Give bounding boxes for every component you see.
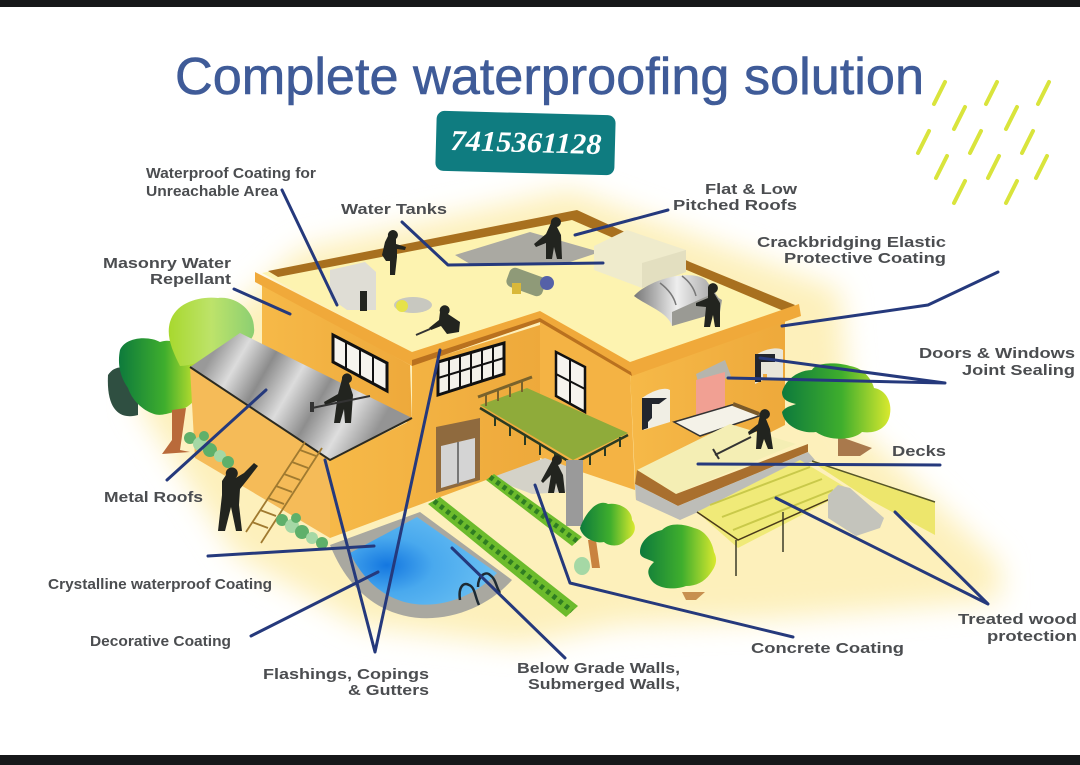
leader: flashings xyxy=(325,350,440,652)
label: joint sealing: Joint Sealing xyxy=(962,362,1075,379)
worker on roof back xyxy=(534,217,562,259)
leader lines xyxy=(167,190,998,658)
right wing arched window lower xyxy=(642,389,670,430)
metal roof xyxy=(190,333,412,460)
leader: metal roofs xyxy=(167,390,266,480)
label: gutters: & Gutters xyxy=(348,682,429,699)
label: crystalline: Crystalline waterproof Coating xyxy=(48,576,272,593)
ground patch under balcony xyxy=(490,458,566,494)
house xyxy=(190,210,815,538)
worker at pillar xyxy=(541,455,565,493)
right side tree xyxy=(782,363,890,456)
yellow fence xyxy=(812,461,935,535)
worker on deck xyxy=(713,409,773,459)
steps xyxy=(828,485,884,536)
rooftop box left xyxy=(330,262,376,311)
leader: crystalline xyxy=(208,546,374,556)
right wing side wall xyxy=(540,322,635,490)
shrub by pool xyxy=(276,513,328,549)
upper left wall xyxy=(262,283,412,425)
label: flashings copings: Flashings, Copings xyxy=(263,666,429,683)
label: metal roofs: Metal Roofs xyxy=(104,489,203,506)
rooftop pale block xyxy=(594,230,686,288)
label: crackbridging elastic: Crackbridging Elastic xyxy=(757,234,946,251)
lower left wall xyxy=(190,367,330,538)
upper left window xyxy=(333,335,387,391)
title: Complete waterproofing solution xyxy=(175,48,924,106)
swimming pool xyxy=(330,512,512,618)
label: unreachable area: Unreachable Area xyxy=(146,183,279,200)
worker crouching on roof xyxy=(416,305,460,335)
label: masonry water: Masonry Water xyxy=(103,255,231,272)
phone number badge xyxy=(435,111,616,175)
bottom black bar xyxy=(0,755,1080,765)
label: waterproof coating: Waterproof Coating for xyxy=(146,165,316,182)
pool ladder xyxy=(460,574,500,605)
label: submerged walls: Submerged Walls, xyxy=(528,676,680,693)
short hedge xyxy=(486,474,582,546)
leader: decks xyxy=(698,464,940,465)
label: protective coating: Protective Coating xyxy=(784,250,946,267)
pool rim xyxy=(330,512,512,618)
label: decks: Decks xyxy=(892,443,946,460)
deck xyxy=(635,424,815,520)
label: water tanks: Water Tanks xyxy=(341,201,447,218)
leader: crackbridging xyxy=(782,272,998,326)
label: pitched roofs: Pitched Roofs xyxy=(673,197,797,214)
roof back parapet xyxy=(268,210,795,312)
phone number badge: 7415361128 xyxy=(450,125,602,161)
small shrubs xyxy=(184,431,590,575)
leader: below grade xyxy=(452,548,565,658)
leader: concrete xyxy=(535,485,793,637)
leader: treated wood xyxy=(776,498,988,604)
ladder xyxy=(246,442,322,543)
worker at barrel tank xyxy=(696,283,720,327)
rooftop equipment xyxy=(330,230,722,326)
roof surface xyxy=(262,215,795,362)
right wing arched window top xyxy=(755,348,783,384)
leader: flat roofs xyxy=(575,210,668,235)
leader: doors and windows xyxy=(728,358,945,383)
label: decorative coating: Decorative Coating xyxy=(90,633,231,650)
label: repellant: Repellant xyxy=(150,271,231,288)
front ribbon window xyxy=(438,343,504,395)
rooftop cans xyxy=(505,266,554,298)
label: protection: protection xyxy=(987,628,1077,645)
roof front edge xyxy=(255,272,801,376)
leader: water tanks xyxy=(402,222,603,265)
side window xyxy=(556,352,585,412)
label: below grade walls: Below Grade Walls, xyxy=(517,660,680,677)
yellow patio roof xyxy=(697,460,850,576)
label: concrete coating: Concrete Coating xyxy=(751,640,904,657)
leader: unreachable area xyxy=(282,190,337,305)
worker on metal roof xyxy=(310,373,370,423)
hedges xyxy=(428,474,582,617)
workers xyxy=(218,217,773,531)
pool water xyxy=(350,517,497,605)
top black bar xyxy=(0,0,1080,7)
lower front wall xyxy=(330,325,540,538)
pink doorway with awning xyxy=(696,360,731,416)
leader: masonry xyxy=(234,289,290,314)
green balcony roof xyxy=(478,377,628,465)
leader: decorative xyxy=(251,572,378,636)
ground glow xyxy=(135,190,1000,645)
label: doors and windows: Doors & Windows xyxy=(919,345,1075,362)
label: treated wood: Treated wood xyxy=(958,611,1077,628)
garden tree round xyxy=(640,524,716,600)
rooftop fan unit xyxy=(394,297,432,313)
front door xyxy=(436,418,480,493)
shrub near small tree xyxy=(574,557,590,575)
label: flat and low: Flat & Low xyxy=(705,181,797,198)
pillar xyxy=(566,460,583,526)
rooftop barrel tank xyxy=(634,275,722,326)
shrub near left tree xyxy=(184,431,234,468)
left trees xyxy=(108,298,254,454)
right wing front wall xyxy=(630,312,785,500)
small balcony xyxy=(674,404,762,436)
decorative yellow-green dashes xyxy=(918,82,1049,203)
long hedge xyxy=(428,497,578,617)
garden tree small xyxy=(580,503,635,568)
worker painting wall xyxy=(218,463,258,531)
worker on roof left xyxy=(382,230,406,275)
rooftop pool pit xyxy=(455,232,600,264)
